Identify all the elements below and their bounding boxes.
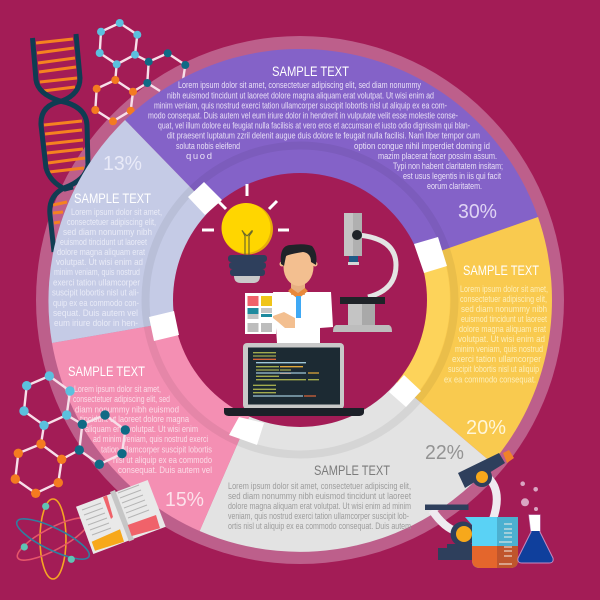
- text block: pink sector: diam nonummy nibh euismod: [75, 404, 179, 416]
- text block: lavender sector: volutpat. Ut wisi enim ad: [56, 257, 143, 268]
- percent: 22%: 22%: [425, 442, 464, 464]
- text block: lavender sector: quip ex ea commodo con-: [53, 298, 139, 309]
- text block: yellow sector: euismod tincidunt ut laoreet: [461, 314, 547, 325]
- panel: 20% yellow sector: [300, 217, 552, 463]
- text block: purple sector: Typi non habent claritatem insitam;: [393, 161, 503, 172]
- text block: lavender sector: sequat. Duis autem vel: [53, 308, 138, 319]
- text block: purple sector: est usus legentis in iis qui facit: [403, 171, 501, 182]
- text block: pink sector: consectetuer adipiscing elit, sed: [73, 394, 170, 405]
- percent: 20%: 20%: [466, 417, 506, 439]
- text block: grey sector: [228, 462, 411, 532]
- percent: 15%: 15%: [165, 489, 204, 511]
- panel: 15% pink sector: [52, 300, 300, 531]
- text block: lavender sector: [52, 190, 162, 329]
- panel: 30% purple sector: [125, 49, 538, 300]
- white ring markers: [149, 182, 447, 445]
- text block: grey sector: sed diam nonummy nibh euismod tincidunt ut laoreet: [228, 491, 411, 502]
- text block: grey sector: veniam, quis nostrud exerci tation ullamcorper suscipit lob-: [228, 511, 409, 522]
- percent: 13%: 13%: [103, 153, 142, 175]
- text block: yellow sector: exerci tation ullamcorper: [452, 354, 541, 365]
- text block: purple sector: quat, vel illum dolore eu feugiat nulla facilisis at vero eros et accumsan et iusto odio dignissim qui blan-: [158, 120, 470, 132]
- text block: lavender sector: exerci tation ullamcorper: [53, 278, 140, 288]
- text block: purple sector: option congue nihil imperdiet doming id: [354, 141, 490, 152]
- text block: grey sector: ortis nisl ut aliquip ex ea commodo consequat. Duis autem: [228, 521, 411, 532]
- text block: lavender sector: eum iriure dolor in hen-: [54, 318, 138, 329]
- rays: [202, 184, 289, 230]
- text block: purple sector: modo consequat. Duis autem vel eum iriure dolor in hendrerit in vulputate velit esse molestie conse-: [148, 110, 458, 122]
- text block: grey sector: dolore magna aliquam erat volutpat. Ut wisi enim ad minim: [228, 501, 411, 512]
- icon: open book: [76, 480, 166, 554]
- text block: yellow sector: sed diam nonummy nibh: [461, 304, 547, 315]
- outer pale ring: [36, 36, 564, 564]
- icon: microscope center: [333, 213, 396, 332]
- text block: yellow sector: [444, 262, 548, 386]
- code lines: [253, 353, 319, 396]
- text block: pink sector: tation ullamcorper suscipit lobortis: [101, 444, 212, 456]
- text block: yellow sector: suscipit lobortis nisl ut aliquip: [448, 364, 539, 375]
- heading: pink: SAMPLE TEXT: [68, 363, 145, 379]
- heading: grey: SAMPLE TEXT: [314, 462, 390, 478]
- heading: lavender: SAMPLE TEXT: [74, 190, 151, 206]
- text block: purple sector: dit praesent luptatum zzril delenit augue duis dolore te feugait nulla facilisi. Nam liber tempor cum: [167, 130, 480, 142]
- text block: pink sector: consequat. Duis autem vel: [118, 465, 212, 476]
- text block: lavender sector: euismod tincidunt ut laoreet: [60, 237, 147, 248]
- text block: grey sector: Lorem ipsum dolor sit amet, consectetuer adipiscing elit,: [228, 481, 411, 492]
- text block: purple sector: soluta nobis eleifend: [176, 141, 240, 152]
- icon: microscope lower right: [425, 450, 514, 560]
- text block: pink sector: aliquam erat volutpat. Ut wisi enim: [85, 424, 198, 435]
- text block: purple sector: mazim placerat facer possim assum.: [378, 151, 497, 162]
- text block: purple sector: minim veniam, quis nostrud exerci tation ullamcorper suscipit lobortis nisl ut aliquip ex ea com-: [154, 100, 447, 112]
- document: [245, 293, 276, 334]
- text block: yellow sector: Lorem ipsum dolor sit amet,: [460, 284, 548, 295]
- text block: lavender sector: sed diam nonummy nibh: [63, 227, 152, 238]
- heading: yellow: SAMPLE TEXT: [463, 262, 539, 278]
- text block: purple sector: eorum claritatem.: [427, 181, 482, 192]
- icon: flask: [518, 481, 553, 563]
- text block: pink sector: tincidunt ut laoreet dolore magna: [80, 414, 190, 425]
- text block: pink sector: [68, 363, 212, 476]
- text block: purple sector: Lorem ipsum dolor sit amet, consectetuer adipiscing elit, sed diam nonummy: [178, 80, 421, 91]
- text block: yellow sector: ex ea commodo consequat.: [444, 374, 536, 386]
- panel: 13% lavender sector: [48, 120, 300, 343]
- text block: yellow sector: minim veniam, quis nostrud: [455, 344, 543, 355]
- text block: purple sector: quod: [186, 151, 212, 162]
- icon: atom: [12, 499, 94, 579]
- inner shaded ring: [146, 146, 454, 454]
- text block: lavender sector: dolore magna aliquam erat: [57, 247, 145, 258]
- text block: purple sector: nibh euismod tincidunt ut laoreet dolore magna aliquam erat volutpat. Ut wisi enim ad: [167, 90, 434, 101]
- text block: pink sector: Lorem ipsum dolor sit amet,: [74, 384, 161, 395]
- text block: lavender sector: consectetuer adipiscing elit,: [67, 217, 156, 228]
- center disc: [173, 173, 427, 427]
- icon: light bulb: [202, 184, 289, 283]
- text block: yellow sector: dolore magna aliquam erat: [459, 324, 546, 335]
- icon: molecule lower left: [11, 371, 130, 498]
- text block: pink sector: nisl ut aliquip ex ea commodo: [113, 455, 212, 466]
- heading: purple: SAMPLE TEXT: [272, 63, 349, 79]
- text block: lavender sector: minim veniam, quis nostrud: [54, 267, 140, 278]
- icon: DNA helix: [32, 34, 88, 252]
- panel: 22% grey sector: [200, 300, 492, 552]
- icon: laptop: [224, 343, 364, 416]
- icon: molecule top: [91, 19, 189, 125]
- text block: lavender sector: suscipit lobortis nisl ut ali-: [52, 288, 139, 298]
- text block: yellow sector: consectetuer adipiscing elit,: [460, 294, 547, 305]
- icon: scientist: [245, 244, 333, 343]
- text block: purple sector: [148, 63, 503, 192]
- percent: 30%: 30%: [458, 201, 497, 223]
- icon: beaker: [465, 517, 518, 568]
- text block: pink sector: ad minim veniam, quis nostrud exerci: [93, 434, 208, 445]
- inner yellow band: [300, 248, 450, 397]
- text block: lavender sector: Lorem ipsum dolor sit amet,: [71, 207, 162, 218]
- text block: yellow sector: volutpat. Ut wisi enim ad: [458, 334, 545, 345]
